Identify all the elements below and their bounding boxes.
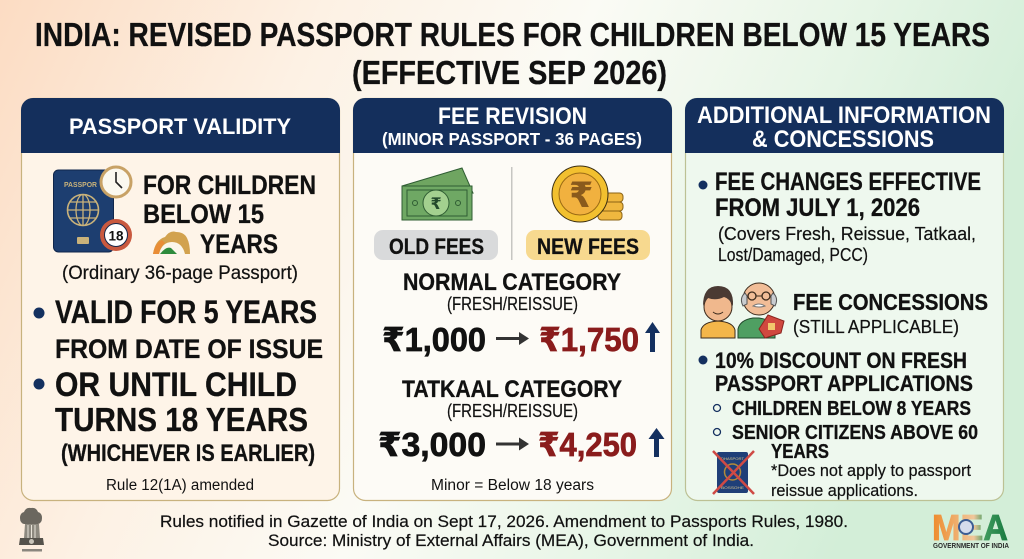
heading: tatkaal category bbox=[402, 376, 622, 421]
bullet: fee changes effective: (Covers Fresh, Reissue, Tatkaal, bbox=[718, 224, 976, 244]
icon: banknotes bbox=[402, 168, 473, 220]
bullet: until child turns 18: (WHICHEVER IS EARLIER) bbox=[61, 440, 315, 467]
bullet: valid for 5 years bbox=[34, 294, 323, 364]
sub-bullet: senior citizens above 60: SENIOR CITIZENS ABOVE 60 bbox=[732, 422, 978, 444]
panel: passport validity bbox=[21, 98, 340, 500]
text: reissue exclusion note bbox=[771, 461, 971, 500]
heading: fee concessions bbox=[793, 289, 988, 337]
icon: crossed-out passport bbox=[713, 451, 754, 494]
panel header: passport validity bbox=[21, 98, 340, 153]
bullet: ten percent discount: 10% DISCOUNT ON FRESH bbox=[715, 348, 967, 373]
fee change: normal category: ₹1,750 bbox=[539, 321, 639, 358]
bullet: fee changes effective bbox=[698, 168, 981, 265]
icon: child and senior citizen bbox=[701, 283, 784, 338]
fee change: tatkaal category: ₹3,000 bbox=[378, 426, 486, 463]
title bbox=[35, 16, 990, 91]
bullet: ten percent discount bbox=[698, 348, 973, 396]
text: minor definition: Minor = Below 18 years bbox=[431, 477, 594, 494]
bullet: fee changes effective: Lost/Damaged, PCC) bbox=[718, 245, 868, 265]
divider bbox=[511, 167, 512, 260]
heading: for children below 15 years: YEARS bbox=[200, 229, 278, 259]
title: (EFFECTIVE SEP 2026) bbox=[352, 54, 667, 91]
panel header: fee revision: FEE REVISION bbox=[438, 103, 587, 130]
logo: MEA Government of India: GOVERNMENT OF INDIA bbox=[933, 541, 1009, 550]
footer: source text bbox=[160, 512, 848, 550]
panel: additional information bbox=[685, 98, 1004, 500]
icon: rupee coins: ₹ bbox=[569, 176, 593, 215]
heading: normal category bbox=[403, 269, 621, 314]
panel: fee revision bbox=[353, 98, 672, 500]
bullet: valid for 5 years: VALID FOR 5 YEARS bbox=[55, 294, 317, 330]
heading: fee concessions: FEE CONCESSIONS bbox=[793, 289, 988, 315]
fee change: normal category bbox=[382, 321, 660, 358]
text: ordinary passport note: (Ordinary 36-page Passport) bbox=[62, 263, 298, 284]
icon: crossed-out passport: BOSSOHE bbox=[721, 485, 744, 490]
bullet: ten percent discount: PASSPORT APPLICATIONS bbox=[715, 371, 973, 396]
text: reissue exclusion note: *Does not apply to passport bbox=[771, 461, 971, 480]
panel header: passport validity: PASSPORT VALIDITY bbox=[69, 114, 291, 139]
text: reissue exclusion note: reissue applications. bbox=[771, 481, 918, 500]
heading: tatkaal category: TATKAAL CATEGORY bbox=[402, 376, 622, 403]
bullet: fee changes effective: FROM JULY 1, 2026 bbox=[715, 194, 920, 222]
label: new fees: NEW FEES bbox=[537, 234, 639, 259]
panel header: additional information: ADDITIONAL INFORMATION bbox=[697, 102, 991, 129]
fee change: tatkaal category: ₹4,250 bbox=[538, 426, 637, 463]
heading: tatkaal category: (FRESH/REISSUE) bbox=[447, 401, 578, 421]
bullet: valid for 5 years: FROM DATE OF ISSUE bbox=[55, 334, 323, 364]
panel header: fee revision: (MINOR PASSPORT - 36 PAGES) bbox=[382, 129, 642, 149]
footer: source text: Source: Ministry of External Affairs (MEA), Government of India. bbox=[268, 531, 754, 550]
footer: source text: Rules notified in Gazette of India on Sept 17, 2026. Amendment to Passports Rules, 1980. bbox=[160, 512, 848, 531]
heading: fee concessions: (STILL APPLICABLE) bbox=[793, 316, 959, 337]
icon: national emblem bbox=[19, 508, 44, 552]
fee change: normal category: ₹1,000 bbox=[382, 321, 486, 358]
heading: normal category: (FRESH/REISSUE) bbox=[447, 294, 578, 314]
label: old fees: OLD FEES bbox=[389, 234, 484, 259]
heading: for children below 15 years bbox=[143, 170, 316, 259]
icon: rupee coins bbox=[552, 166, 623, 222]
panel header: additional information: & CONCESSIONS bbox=[752, 126, 934, 153]
icon: banknotes: ₹ bbox=[430, 196, 442, 213]
bullet: until child turns 18: OR UNTIL CHILD bbox=[55, 366, 297, 404]
heading: normal category: NORMAL CATEGORY bbox=[403, 269, 621, 296]
bullet: until child turns 18 bbox=[34, 366, 315, 467]
heading: for children below 15 years: FOR CHILDREN bbox=[143, 170, 316, 200]
icon: passport with clock and age badge: 18 bbox=[108, 228, 124, 244]
panel header: additional information bbox=[685, 98, 1004, 153]
icon: passport with clock and age badge bbox=[54, 167, 132, 252]
icon: tricolour emblem bbox=[153, 232, 190, 254]
text: rule reference: Rule 12(1A) amended bbox=[106, 477, 254, 494]
sub-bullet: children below 8: CHILDREN BELOW 8 YEARS bbox=[732, 398, 971, 420]
logo: MEA Government of India: MEA bbox=[932, 507, 1008, 548]
sub-bullet: senior citizens above 60 bbox=[714, 422, 978, 463]
bullet: until child turns 18: TURNS 18 YEARS bbox=[55, 401, 308, 438]
icon: crossed-out passport: DHASPORT bbox=[721, 456, 745, 461]
fee change: tatkaal category bbox=[378, 426, 664, 463]
panel header: fee revision bbox=[353, 98, 672, 153]
sub-bullet: senior citizens above 60: YEARS bbox=[771, 441, 829, 463]
heading: for children below 15 years: BELOW 15 bbox=[143, 199, 264, 229]
icon: passport with clock and age badge: PASSPOR bbox=[64, 180, 98, 189]
